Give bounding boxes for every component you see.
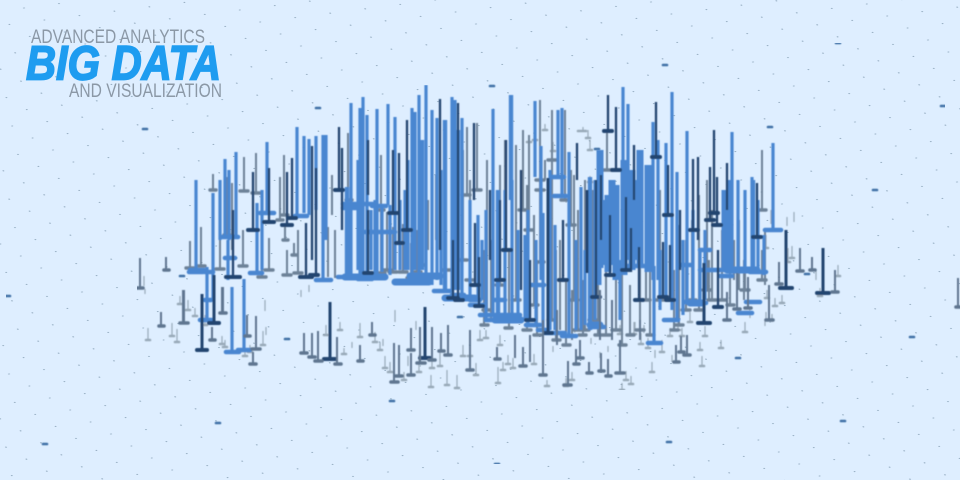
title	[26, 26, 222, 102]
subtitle: advanced analytics: ADVANCED ANALYTICS	[31, 26, 205, 48]
heading: big data: BIG DATA	[26, 38, 221, 90]
light blue pins	[189, 85, 781, 352]
small background pins	[144, 124, 840, 390]
grey pins behind	[186, 100, 766, 345]
dark navy pins	[197, 95, 829, 359]
data pin field	[137, 85, 960, 390]
grey and dark pins in front	[137, 248, 960, 385]
subtitle: and visualization: AND VISUALIZATION	[69, 80, 222, 102]
